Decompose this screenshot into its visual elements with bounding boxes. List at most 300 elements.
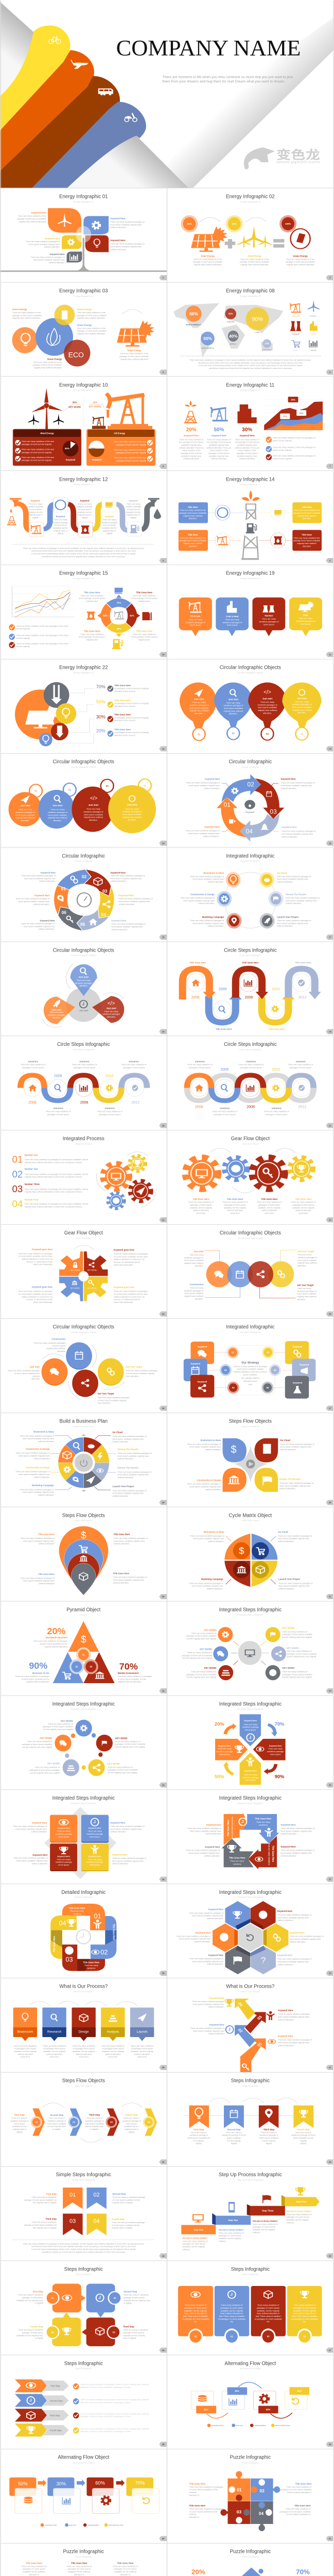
heading: Steps Flow Objects <box>229 1419 272 1425</box>
text: keyword 4: There are many <box>102 519 116 521</box>
text: red: There are many variations passages of <box>114 1537 148 1539</box>
text: blue: There are many variations passages of <box>281 1827 315 1829</box>
text: top 3: alteration in <box>120 2573 130 2575</box>
text: column 3: suffered alteration <box>239 458 255 460</box>
text: red: There are many variations passages of <box>281 1850 315 1852</box>
text: yellow: Keyword Here <box>119 894 134 897</box>
text: yellow: of Lorem Ipsum available, but the have <box>114 1293 148 1295</box>
panel: slide 28 <box>15 1419 167 1505</box>
text: orange: Keyword Here <box>196 1931 211 1934</box>
text: column 5: There are many variations <box>131 2045 153 2047</box>
text: 3: suffered alteration <box>261 1210 277 1212</box>
text: blue: humour, or randomized words <box>26 1299 52 1301</box>
text: yellow: There are many variations passages of <box>289 1936 324 1938</box>
oil panel: Keyword <box>92 459 102 461</box>
speech boxes <box>52 2284 115 2346</box>
drop: orange: Just start <box>51 1009 62 1011</box>
bubble: orange <box>9 784 42 826</box>
text: column 3: the passage of lorem ipsum <box>235 442 259 444</box>
rotated caption: red: Title Goes Here <box>271 1846 274 1862</box>
text: wind: majority have suffered alteration <box>240 264 269 266</box>
text: red title: majority have <box>138 600 150 602</box>
text: second: Second Step <box>112 2193 126 2195</box>
text: blue keyword: Keyword Here <box>110 217 126 220</box>
text: first step: slightly <box>16 2131 23 2133</box>
text: top stats: passages of lorem ipsum <box>189 1066 211 1069</box>
text: just start: variations passages of <box>184 1257 204 1259</box>
text: 1: some form <box>196 1212 205 1214</box>
text: keyword 5: There are many <box>127 503 140 505</box>
text: column 4: some form <box>108 2056 117 2058</box>
card: oil and gas: lorem ipsum <box>190 624 201 626</box>
connectors <box>52 689 95 743</box>
honeycomb <box>213 1901 288 1974</box>
text: review: Review The Results <box>279 1478 301 1481</box>
arrow labels: 02 <box>237 2028 244 2033</box>
stat: 90: There are many variations of passages <box>15 1675 49 1677</box>
text: marketing: lorem ipsum available majority have <box>192 1585 223 1587</box>
text: keyword 1: of lorem ipsum <box>29 509 42 511</box>
text: yellow: KEY WORD <box>282 1627 294 1630</box>
text: construction 2: Construction & Design <box>26 1466 50 1469</box>
arcs <box>209 2098 297 2103</box>
text: orange: There are many variations passages of <box>185 830 220 832</box>
text: blue keyword: lorem ipsum available majority have <box>110 224 142 226</box>
oil panel: passages of lorem but the majority <box>116 460 146 462</box>
panel: slide 53 <box>189 2549 333 2576</box>
drop: blue: variations passages <box>75 982 92 984</box>
card: research: Research <box>47 2030 62 2034</box>
text: yellow: There are many variations passages of <box>112 1857 147 1859</box>
page number: 14 <box>162 842 165 844</box>
heading: Puzzle Infographic <box>230 2549 271 2554</box>
stat: 20: majority suffered alteration <box>44 1646 67 1648</box>
text: bottom stats: passages of lorem ipsum <box>99 1113 121 1115</box>
arrow ring: 01 <box>224 801 231 808</box>
four color gear <box>59 1251 108 1301</box>
banners: 04 <box>93 2218 100 2224</box>
text: brainstorm: suffered alteration. <box>208 881 224 883</box>
stat: 20: 20% <box>47 1626 65 1636</box>
subheading: Energy Infographic 01 <box>74 200 94 203</box>
percent columns: Keyword here <box>184 434 199 437</box>
text: red: There are many variations passages of <box>281 782 315 784</box>
page number: 44 <box>162 2255 165 2257</box>
ribbon labels: There are many <box>70 1910 84 1912</box>
oil panel: There are many variations of the new <box>114 449 146 451</box>
text: bottom stats: STATISTICS <box>272 1108 282 1110</box>
step titles: Title Goes Here <box>295 961 311 964</box>
text: our strategy: form <box>249 1384 252 1386</box>
page number <box>159 2065 167 2070</box>
text: blue: Keyword Here <box>110 1822 126 1824</box>
text: yellow: There are many variations passages of <box>119 898 153 900</box>
text: orange keyword: majority have suffered alteration <box>19 221 46 223</box>
page number <box>159 1405 167 1411</box>
donut pointers and labels: 30% <box>130 615 134 617</box>
text: paragraph: to be sure there embarrassing hidden in the middle of text. All the lorem ipsum generators on the internet tend to repeat <box>31 553 136 555</box>
text: first step: First Step <box>14 2114 25 2116</box>
page number: 10 <box>162 653 165 656</box>
value boxes: 30% <box>56 2481 66 2486</box>
page number <box>326 1688 333 1693</box>
page number <box>326 2253 333 2259</box>
ribbon labels: 01 <box>94 1912 101 1920</box>
page number <box>159 1311 167 1316</box>
card: 02: form There many of variation <box>219 2315 244 2317</box>
card: 01: have suffered alteration in <box>184 2313 207 2315</box>
subheading: Energy Infographic 15 <box>74 577 94 580</box>
text: 1: There are many variations of <box>188 1201 214 1204</box>
text: second: majority have in slightly <box>112 2202 133 2204</box>
card: yellow: There are many variations the <box>294 510 320 512</box>
card: red: passage lorem ipsum available <box>293 540 320 542</box>
card: yellow <box>292 502 322 523</box>
page number: 22 <box>162 1218 165 1221</box>
text: orange: Keyword Here <box>204 826 220 828</box>
card: red: variations passage <box>56 1861 72 1863</box>
text: slate: Keyword Here <box>277 1954 293 1957</box>
jigsaw <box>220 2471 280 2531</box>
text: keyword 5: variation passage <box>126 506 141 508</box>
years: 2009 <box>54 1074 62 1078</box>
text: orange: humour, or randomized words <box>26 1261 52 1263</box>
step titles: Title Goes Here <box>242 961 259 964</box>
page number: 25 <box>329 1313 331 1315</box>
text: first step: majority have in <box>12 2128 26 2130</box>
subheading: Energy Infographic 11 <box>240 389 261 392</box>
text: get your target yellow: variations passages of <box>297 1257 318 1259</box>
petals <box>223 1438 278 1492</box>
text: top 2: Title Goes Here <box>71 2562 87 2564</box>
text: gray: suffered alteration. <box>207 1963 223 1965</box>
step 01: 01 <box>12 1154 23 1165</box>
text: blue: Title Goes Here <box>38 1573 55 1575</box>
stat: 70: There are many variations of passages <box>118 1675 152 1677</box>
wind callout: KEY WORD <box>68 405 81 408</box>
stat: 20 <box>33 1626 68 1648</box>
card: 03: of passages of Lorem available <box>255 2318 282 2320</box>
text: launch: There are many variations passages of <box>278 1582 313 1584</box>
pyramid: $ <box>81 1634 86 1645</box>
text: gray: There are many variations passages of <box>113 1577 148 1579</box>
text: blue: There are many variations of <box>287 2486 312 2488</box>
text: construction: Construction & Design <box>190 893 215 896</box>
subheading: Integrated Steps Infographic <box>237 1802 263 1804</box>
text: review: lorem ipsum available majority have <box>117 1455 149 1457</box>
text: 70: of passages of lorem but the is majority <box>114 688 149 690</box>
years: 2008 <box>247 1105 255 1109</box>
energy legend icons: SOLAR <box>311 349 317 351</box>
heading: Simple Steps Infographic <box>56 2172 111 2178</box>
text: third: but the majority <box>262 2140 276 2142</box>
card: brainstorm <box>13 2008 37 2041</box>
number circles <box>46 2292 121 2338</box>
text: orange: Just start <box>194 698 204 700</box>
text: second step: There are many in <box>49 2117 65 2120</box>
page number: 34 <box>162 1784 165 1786</box>
text: red: Keyword Here <box>281 1845 296 1848</box>
card: 01: There many variations of <box>185 2304 207 2307</box>
wind panel: passages of lorem but the majority <box>22 460 51 462</box>
rotated caption: red <box>268 1842 274 1866</box>
text: middle right: There are many variations of the <box>77 327 106 329</box>
text: marketing: There are many variations passages of <box>20 1488 54 1490</box>
text: target yellow: of lorem ipsum available majority <box>126 1372 154 1375</box>
step 03: There are many variations of passages of Lorem Ipsum available, but the <box>25 1188 88 1190</box>
step 03: majority have suffered alteration in some form, by injected humour. <box>25 1191 83 1193</box>
text: red: but the majority have even slightly <box>115 1746 145 1748</box>
bubble: orange: There are many <box>18 809 32 811</box>
page number <box>326 464 333 469</box>
text: red: There are many variations of <box>191 1671 217 1673</box>
text: second: but the majority <box>227 2140 241 2142</box>
text: second: There are many in variations <box>124 2294 149 2296</box>
bubble: orange: alteration. <box>21 820 29 822</box>
bubble: blue: alteration. <box>53 820 62 822</box>
spokes <box>231 1641 269 1665</box>
text: just start: of lorem ipsum majority have <box>14 1372 40 1375</box>
text: gray: lorem ipsum available majority have <box>24 925 55 927</box>
text: fourth: majority have in slightly <box>112 2227 132 2229</box>
page number: 17 <box>329 936 331 939</box>
number circles: 04 <box>51 2331 54 2333</box>
center power button <box>73 1451 95 1474</box>
right cards <box>285 1341 315 1399</box>
flags <box>189 2106 313 2128</box>
text: 4: suffered alteration <box>295 1210 311 1212</box>
circles <box>42 1342 124 1397</box>
panel: slide 21 <box>187 1042 333 1128</box>
page number: 9 <box>329 560 331 562</box>
banners: 02 <box>93 2192 100 2198</box>
step 03: 03 <box>12 1183 23 1194</box>
text: orange: Title Goes Here <box>189 2482 206 2485</box>
text: orange: lorem ipsum available majority have <box>179 1938 210 1940</box>
page number: 45 <box>329 2255 331 2257</box>
text: go cloud: There are many variations passages of <box>113 1435 147 1437</box>
text: fourth: There are many in <box>295 2131 311 2133</box>
text: yellow: suffered alteration <box>208 2006 224 2008</box>
banners <box>63 2188 107 2235</box>
text: second: in slightly <box>124 2302 132 2304</box>
text: gray: There are many variations of <box>286 2508 311 2510</box>
arrow captions: There are many <box>256 1821 270 1823</box>
arrow captions: There are many <box>230 1860 244 1862</box>
text: gray: There are many variations passages of <box>189 1958 224 1960</box>
page number <box>159 369 167 375</box>
text: construction: lorem ipsum available <box>184 1293 204 1295</box>
text: slate: lorem ipsum available majority have <box>277 1961 309 1963</box>
text: slate: passages of lorem ipsum available <box>287 1653 317 1655</box>
connectors <box>204 1250 296 1298</box>
page number: 42 <box>162 2161 165 2163</box>
number nodes: 01 <box>232 1351 234 1354</box>
heading: Alternating Flow Object <box>224 2361 276 2366</box>
text: top stats: There are many variations of <box>21 1064 46 1066</box>
legend: ANALYSIS <box>68 2524 76 2526</box>
text: blue title: majority have <box>86 600 98 602</box>
text: solar: There are many variations of the <box>120 353 148 355</box>
text: first: First Step <box>194 2128 204 2131</box>
text: orange: lorem ipsum available majority have <box>18 901 49 903</box>
text: second: available but the majority have <box>124 2299 150 2301</box>
text: slate: suffered alteration. <box>282 836 298 838</box>
text: 70: Title Goes Here <box>114 684 131 687</box>
text: red: lorem ipsum available majority have <box>111 877 142 879</box>
panel: slide 13 <box>180 665 333 751</box>
text: launch: suffered alteration. <box>113 1495 129 1497</box>
text: orange: suffered alteration. <box>278 2044 294 2046</box>
heading: Gear Flow Object <box>64 1230 103 1236</box>
panel: slide 17 <box>181 853 333 940</box>
text: paragraph: predefined chunks as of lorem but the majority have suffered alteration in some form necessary <box>42 2251 125 2253</box>
pointers <box>226 1536 276 1584</box>
text: yellow: suffered alteration. <box>119 903 135 905</box>
subheading: Integrated Infographic <box>240 1331 260 1333</box>
bubble: yellow: There are many <box>125 808 139 810</box>
subheading: Puzzle Infographic <box>242 2555 259 2558</box>
text: bottom stats: There are many variations of <box>97 1111 123 1113</box>
page number <box>159 1500 167 1505</box>
value tags: 50% <box>297 2389 302 2392</box>
donut diagram <box>100 598 137 633</box>
text: brainstorm: suffered alteration. <box>208 1540 224 1543</box>
text: first step: variations passage of <box>10 2120 29 2122</box>
card: yellow: alteration <box>303 518 311 520</box>
page number <box>326 275 333 280</box>
pentagon: orange: Keyword Here <box>218 1745 231 1747</box>
text: orange: suffered alteration. <box>203 835 220 837</box>
text: bottom stats <box>212 1108 290 1115</box>
text: blue: of Lorem Ipsum available, but the have <box>19 1293 52 1295</box>
linked circles <box>206 1261 294 1287</box>
percent columns: Keyword here <box>240 434 255 437</box>
subheading: Circle Steps Infographic <box>239 1048 261 1050</box>
text: yellow: lorem ipsum available majority have <box>289 1938 321 1940</box>
card: 01 <box>178 2286 213 2344</box>
text: red: suffered alteration. <box>114 1543 130 1545</box>
text: gray: Keyword Here <box>205 1846 220 1849</box>
text: orange title: There are many variations <box>81 633 103 635</box>
text: orange: lorem ipsum available majority have <box>15 1828 47 1830</box>
heading: Cycle Matrix Object <box>228 1513 272 1518</box>
text: column 3: available, but the majority <box>73 2050 95 2053</box>
text: our strategy: ipsum available <box>243 1374 257 1376</box>
chevrons <box>15 2379 47 2436</box>
jigsaw: 01 <box>237 2487 242 2493</box>
pentagon: red: Keyword Here <box>269 1745 282 1747</box>
panel: slide 22 <box>12 1136 167 1223</box>
rotated caption: orange: Title Goes Here <box>227 1820 230 1836</box>
heading: Circle Steps Infographic <box>224 1042 277 1047</box>
years: 2012 <box>131 1101 139 1105</box>
orbit nodes <box>217 872 283 928</box>
subheading: Circular Infographic <box>75 860 93 862</box>
heading: Circular Infographic Objects <box>53 759 114 765</box>
text: 1: suffered alteration <box>193 1210 209 1212</box>
map bubbles: 60% <box>189 311 198 316</box>
text: paragraph: to be sure there embarrassing hidden in the middle of text. All the lorem ipsum generators on the internet tend to repeat <box>31 2248 136 2250</box>
page number: 30 <box>162 1596 165 1598</box>
text: blue: Keyword Here <box>41 871 56 874</box>
pentagon: orange: lorem ipsum <box>219 1753 230 1755</box>
text: orange: Keyword goes here <box>32 1248 53 1251</box>
text: top stats: STATISTICS <box>80 1061 90 1063</box>
text: first: the majority <box>194 2140 204 2142</box>
wind panel: There are many variations of the new <box>22 449 54 451</box>
heading: Circular Infographic Objects <box>53 1325 114 1330</box>
drop: red: Just start <box>106 1007 116 1010</box>
right cards: Keyword <box>293 1345 302 1348</box>
text: step notes: alteration There are many variations of passages of lorem <box>80 2416 131 2418</box>
text: 3: There are many variations of <box>257 1201 283 1204</box>
wave <box>21 1075 147 1100</box>
heading: Pyramid Object <box>66 1607 101 1613</box>
drop: red <box>92 996 124 1023</box>
pentagon: yellow: There are many <box>243 1774 257 1776</box>
text: slate: but the majority have even slightly <box>30 1772 60 1774</box>
text: red: There are many variations passages of <box>277 1914 312 1916</box>
text: middle right: passage of lorem ipsum available <box>77 330 107 332</box>
text: blue: which don't believable <box>33 1301 52 1303</box>
text: construction: of lorem ipsum <box>52 1345 65 1347</box>
heading: Steps Infographic <box>64 2361 103 2366</box>
panel: slide 44 <box>13 2172 167 2259</box>
subheading: Steps Flow Objects <box>241 1425 259 1428</box>
card: research <box>42 2008 66 2041</box>
wind panel <box>13 429 81 466</box>
text: our strategy: lorem ipsum available majority <box>237 1368 263 1370</box>
text: blue title: There are many variations <box>81 595 103 597</box>
four color gear: KEY WORD <box>87 1287 97 1289</box>
heading: Circular Infographic Objects <box>53 947 114 953</box>
rotated caption: orange <box>227 1817 233 1840</box>
percentages: 50% <box>215 1774 224 1780</box>
text: just start: There are many variations passages <box>8 1370 40 1372</box>
page number <box>326 558 333 563</box>
stat: 90: Business To Go <box>32 1672 49 1674</box>
text: red: suffered alteration. <box>281 787 297 789</box>
card: 02: have suffered alteration in <box>220 2313 243 2315</box>
arrow ring <box>217 774 285 841</box>
text: column 1: available majority have <box>181 455 201 457</box>
card: blue: There are many variations the <box>180 510 206 512</box>
panel: slide 38 <box>50 1890 167 1976</box>
text: yellow: There are many variations of <box>108 1766 133 1768</box>
legend <box>207 2424 290 2427</box>
text: column 2: There are many variations <box>43 2045 66 2047</box>
page number <box>326 1971 333 1976</box>
watermark logo: 变色龙 <box>276 148 320 162</box>
tag labels <box>49 2385 63 2432</box>
text: fourth step: slightly <box>129 2131 134 2133</box>
text: marketing: Marketing Campaign <box>202 916 224 919</box>
subheading: Integrated Steps Infographic <box>237 1614 263 1616</box>
text: blue: lorem ipsum available majority have <box>110 1828 142 1830</box>
area chart: 30% <box>291 398 295 401</box>
text: step three: suffered. <box>253 2231 260 2233</box>
donut pointers and labels: 70% <box>117 602 121 604</box>
text: orange: Keyword Here <box>278 2035 293 2038</box>
text: fourth: Fourth Step <box>30 2325 43 2328</box>
subheading: Integrated Infographic <box>240 860 260 862</box>
text: 2: some form <box>231 1212 240 1214</box>
heading: Circular Infographic Objects <box>220 665 281 671</box>
text: second step: but the majority have <box>47 2126 66 2128</box>
page number: 6 <box>163 465 164 468</box>
page number: 13 <box>329 748 331 750</box>
